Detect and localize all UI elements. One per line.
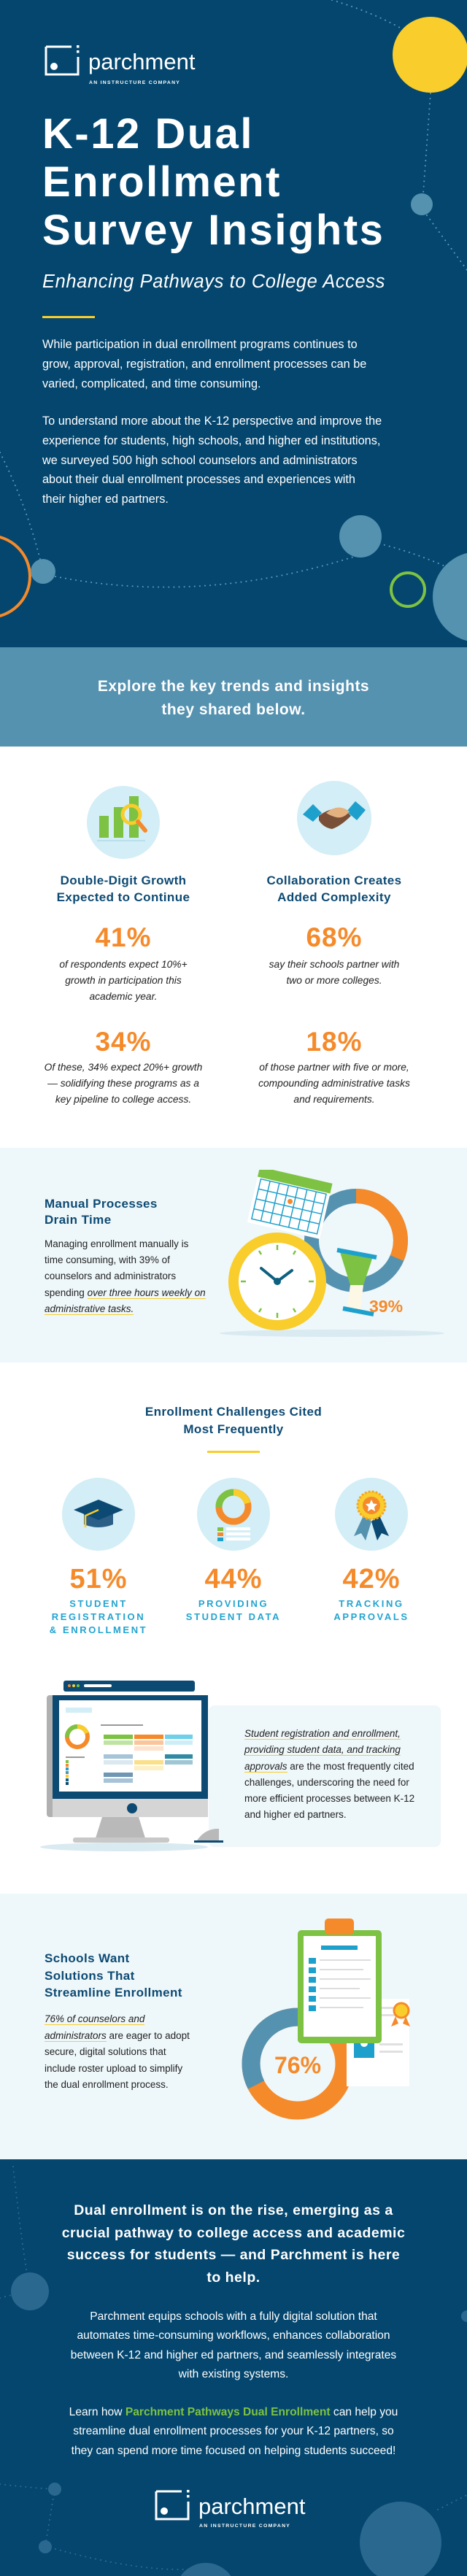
closing text xyxy=(71,2310,396,2380)
text: the dual enrollment process. xyxy=(45,2079,169,2090)
text: Of these, 34% expect 20%+ growth xyxy=(45,1062,202,1073)
panel: growth xyxy=(45,786,202,1105)
stat: 42% xyxy=(333,1478,409,1622)
call to action: Learn how Parchment Pathways Dual Enrollment can help you xyxy=(69,2406,398,2418)
value: 51% xyxy=(69,1564,128,1594)
logo: parchment footer: parchment xyxy=(198,2494,306,2519)
heading: Collaboration Creates xyxy=(266,874,402,887)
label: STUDENT DATA xyxy=(186,1611,281,1622)
stat: 44% xyxy=(186,1478,281,1622)
decor: hero circles and dotted lines xyxy=(0,0,467,641)
illustration: donut 76% with clipboard xyxy=(242,1918,410,2119)
text xyxy=(258,1062,410,1105)
text xyxy=(45,1238,206,1315)
text: administrative tasks. xyxy=(45,1303,134,1314)
label: REGISTRATION xyxy=(52,1611,145,1622)
illustration: monitor dashboard xyxy=(40,1681,223,1851)
closing headline: to help. xyxy=(207,2270,260,2286)
text: two or more colleges. xyxy=(286,975,382,986)
panel: collaboration xyxy=(258,781,410,1105)
closing headline: crucial pathway to college access and academic xyxy=(62,2225,405,2241)
heading: challenges xyxy=(145,1405,322,1436)
intro text 2: about their dual enrollment processes and experiences with xyxy=(42,473,355,486)
call to action: streamline dual enrollment processes for your K-12 partners, so xyxy=(73,2425,394,2437)
heading xyxy=(45,1197,158,1227)
icon: chart document xyxy=(197,1478,270,1551)
text: growth in participation this xyxy=(65,975,182,986)
icon: bar chart magnifier xyxy=(87,786,160,859)
heading: Schools Want xyxy=(45,1951,130,1965)
value: 42% xyxy=(342,1564,401,1594)
text: academic year. xyxy=(89,991,158,1002)
callout: challenges summary: challenges, underscoring the need for xyxy=(244,1777,409,1788)
heading: Solutions That xyxy=(45,1969,135,1982)
text: of those partner with five or more, xyxy=(259,1062,409,1073)
callout: challenges summary: and higher ed partners. xyxy=(244,1809,347,1820)
banner: explore: Explore the key trends and insights xyxy=(98,678,369,695)
decor: closing circles xyxy=(0,2166,467,2576)
stat 68%: 68% xyxy=(306,922,363,952)
heading: challenges: Most Frequently xyxy=(183,1422,284,1436)
stat: 51% xyxy=(50,1478,147,1635)
closing text: between K-12 and higher ed partners, and seamlessly integrates xyxy=(71,2349,396,2361)
label: PROVIDING xyxy=(198,1598,269,1609)
banner: explore: they shared below. xyxy=(161,701,306,718)
text: and requirements. xyxy=(293,1094,375,1105)
text: of respondents expect 10%+ xyxy=(59,959,188,970)
heading: Streamline Enrollment xyxy=(45,1986,182,2000)
divider xyxy=(207,1451,260,1453)
text xyxy=(269,959,399,986)
text: administrators are eager to adopt xyxy=(45,2030,190,2040)
label: APPROVALS xyxy=(333,1611,409,1622)
text: counselors and administrators xyxy=(45,1270,176,1281)
intro text 2: To understand more about the K-12 perspective and improve the xyxy=(42,414,382,428)
stat 41%: 41% xyxy=(95,922,152,952)
logo: parchment footer: AN INSTRUCTURE COMPANY xyxy=(199,2523,290,2529)
label xyxy=(186,1598,281,1622)
logo: parchment footer xyxy=(155,2490,306,2529)
text xyxy=(45,1062,202,1105)
heading xyxy=(45,1951,182,2000)
text: 76% of counselors and xyxy=(45,2013,144,2024)
closing text: Parchment equips schools with a fully digital solution that xyxy=(90,2310,377,2323)
intro text xyxy=(42,338,366,390)
heading: Double-Digit Growth xyxy=(61,874,186,887)
text: key pipeline to college access. xyxy=(55,1094,191,1105)
heading: Drain Time xyxy=(45,1213,112,1227)
text: spending over three hours weekly on xyxy=(45,1287,206,1298)
illustration: clock, calendar, donut 39%: 39% xyxy=(369,1297,403,1316)
text: time consuming, with 39% of xyxy=(45,1254,170,1265)
icon: award ribbon xyxy=(335,1478,408,1551)
closing text: with existing systems. xyxy=(179,2368,288,2380)
closing headline xyxy=(62,2202,405,2286)
label xyxy=(50,1598,147,1635)
text: include roster upload to simplify xyxy=(45,2062,182,2074)
label xyxy=(333,1598,409,1622)
intro text: varied, complicated, and time consuming. xyxy=(42,377,261,390)
intro text 2 xyxy=(42,414,382,506)
intro text: While participation in dual enrollment programs continues to xyxy=(42,338,358,351)
logo: parchment header xyxy=(45,45,196,85)
logo: parchment header: parchment xyxy=(88,49,196,74)
text: say their schools partner with xyxy=(269,959,399,970)
text xyxy=(59,959,188,1002)
intro text: grow, approval, registration, and enrollment processes can be xyxy=(42,358,366,371)
subtitle: Enhancing Pathways to College Access xyxy=(42,271,385,292)
heading xyxy=(57,874,190,904)
title: Survey Insights xyxy=(42,207,385,254)
callout: challenges summary xyxy=(209,1705,441,1847)
closing headline: Dual enrollment is on the rise, emerging as a xyxy=(74,2202,393,2218)
label: STUDENT xyxy=(69,1598,128,1609)
intro text 2: their higher ed partners. xyxy=(42,493,169,506)
title xyxy=(42,110,385,254)
title: K-12 Dual xyxy=(42,110,254,158)
illustration: clock, calendar, donut 39% xyxy=(220,1170,444,1337)
icon: graduation cap xyxy=(62,1478,135,1551)
illustration: donut 76% with clipboard: 76% xyxy=(274,2052,321,2078)
closing text: automates time-consuming workflows, enhances collaboration xyxy=(77,2329,390,2342)
intro text 2: experience for students, high schools, and higher ed institutions, xyxy=(42,434,380,447)
stat 34%: 34% xyxy=(95,1027,152,1057)
logo: parchment header: AN INSTRUCTURE COMPANY xyxy=(89,80,180,85)
text: compounding administrative tasks xyxy=(258,1078,410,1089)
divider: yellow xyxy=(42,316,95,318)
label: TRACKING xyxy=(339,1598,404,1609)
callout: challenges summary: providing student data, and tracking xyxy=(244,1744,401,1755)
heading: Expected to Continue xyxy=(57,890,190,904)
panel: solutions xyxy=(0,1894,467,2159)
text: Managing enrollment manually is xyxy=(45,1238,188,1249)
heading xyxy=(266,874,402,904)
heading: Manual Processes xyxy=(45,1197,158,1211)
call to action xyxy=(69,2406,398,2457)
call to action: they can spend more time focused on helping students succeed! xyxy=(72,2445,395,2457)
text: — solidifying these programs as a xyxy=(47,1078,199,1089)
title: Enrollment xyxy=(42,158,282,206)
label: & ENROLLMENT xyxy=(50,1624,147,1635)
callout: challenges summary: approvals are the most frequently cited xyxy=(244,1761,414,1772)
banner: explore xyxy=(0,647,467,747)
section: hero background xyxy=(0,0,467,647)
stat 18%: 18% xyxy=(306,1027,363,1057)
value: 44% xyxy=(204,1564,263,1594)
section: closing xyxy=(0,2159,467,2576)
heading: challenges: Enrollment Challenges Cited xyxy=(145,1405,322,1419)
heading: Added Complexity xyxy=(277,890,391,904)
closing headline: success for students — and Parchment is here xyxy=(67,2247,400,2263)
icon: handshake xyxy=(297,781,371,855)
text: secure, digital solutions that xyxy=(45,2046,166,2057)
text xyxy=(45,2013,190,2090)
callout: challenges summary: more efficient processes between K-12 xyxy=(244,1793,414,1804)
panel: manual processes xyxy=(0,1148,467,1362)
intro text 2: we surveyed 500 high school counselors and administrators xyxy=(42,454,358,467)
callout: challenges summary: Student registration and enrollment, xyxy=(244,1728,401,1739)
